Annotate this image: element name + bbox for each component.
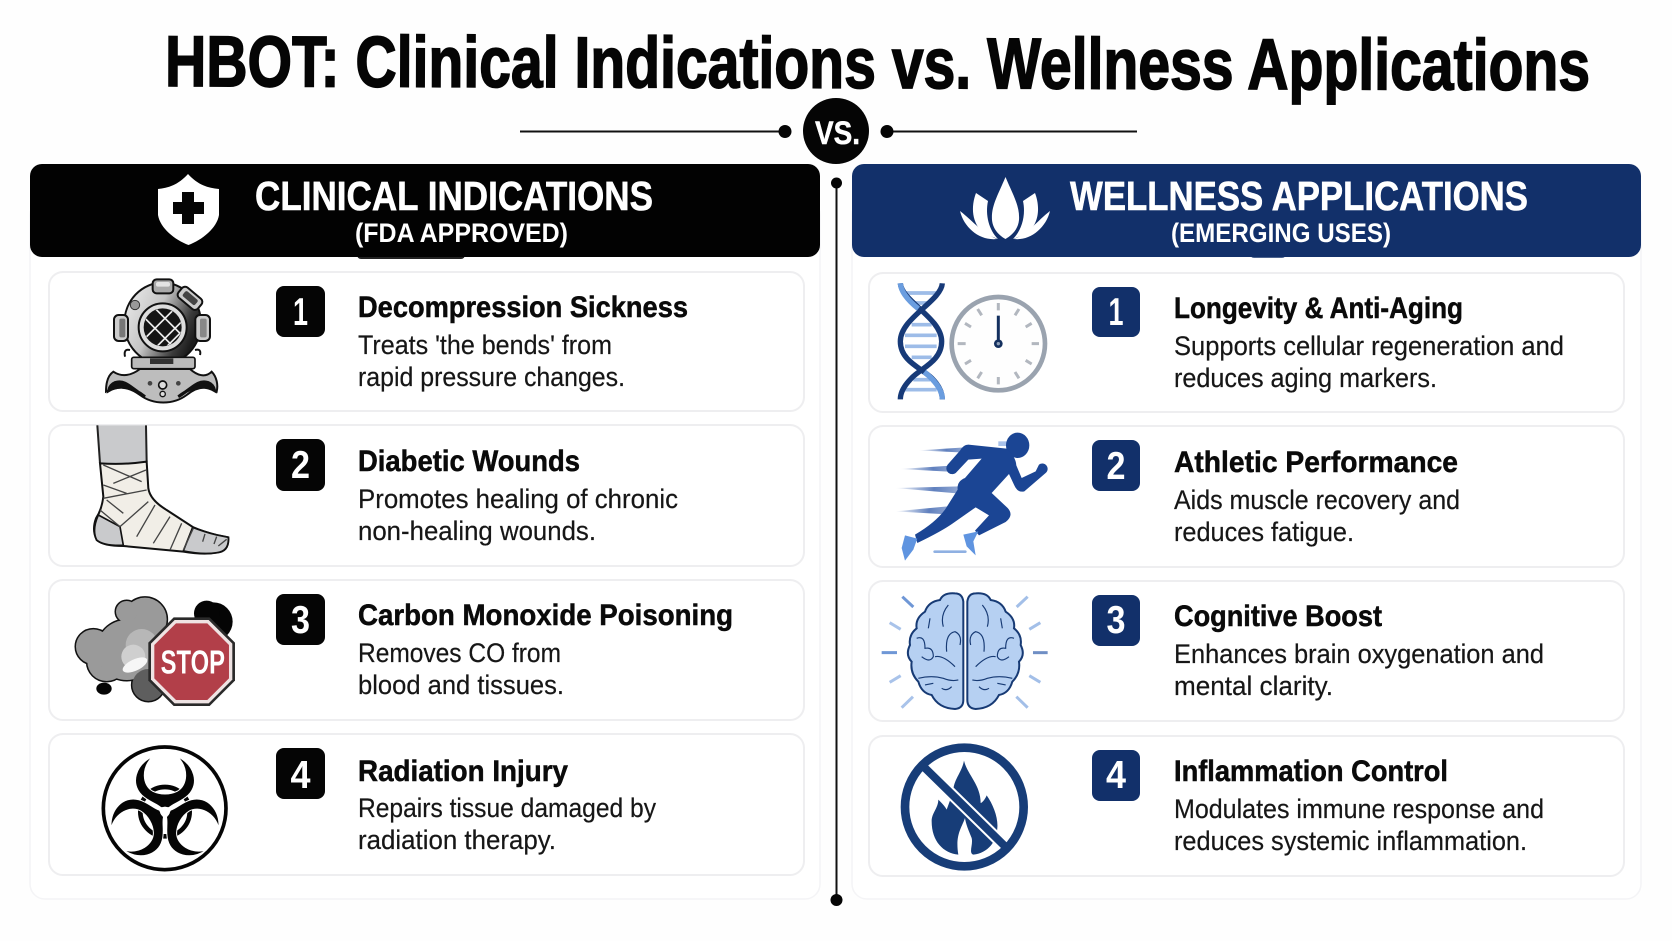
item heading: Longevity & Anti-Aging <box>1174 292 1463 325</box>
panel: clinical indications background <box>30 200 820 899</box>
wellness subheading: (EMERGING USES) <box>1171 218 1391 248</box>
number badge 2 <box>1092 440 1140 491</box>
number badge 4 <box>1092 750 1140 801</box>
item description: reduces systemic inflammation. <box>1174 826 1527 856</box>
item description: Promotes healing of chronic <box>358 484 678 514</box>
item description <box>358 638 564 700</box>
item description: Modulates immune response and <box>1174 794 1544 824</box>
icon: dna helix and clock <box>900 283 1045 399</box>
clinical heading: CLINICAL INDICATIONS <box>255 173 653 219</box>
item description <box>358 793 657 855</box>
item description <box>1174 331 1564 393</box>
item description: rapid pressure changes. <box>358 362 625 392</box>
number badge 2: 2 <box>1106 445 1126 488</box>
item description: Aids muscle recovery and <box>1174 485 1460 515</box>
number badge 4: 4 <box>290 754 311 797</box>
item description: blood and tissues. <box>358 670 564 700</box>
item description: Treats 'the bends' from <box>358 330 612 360</box>
item description: non-healing wounds. <box>358 516 596 546</box>
item description: reduces aging markers. <box>1174 363 1437 393</box>
clinical subheading: (FDA APPROVED) <box>355 218 568 248</box>
item description <box>1174 485 1460 547</box>
item description <box>1174 639 1544 701</box>
card: cognitive boost <box>869 581 1624 721</box>
item heading: Inflammation Control <box>1174 755 1448 788</box>
number badge 1: 1 <box>293 291 308 334</box>
card: diabetic wounds <box>49 425 804 566</box>
icon: shield with cross <box>158 174 219 245</box>
number badge 4 <box>276 748 325 799</box>
wellness heading: WELLNESS APPLICATIONS <box>1070 173 1528 219</box>
item description: Enhances brain oxygenation and <box>1174 639 1544 669</box>
vs divider: VS. <box>815 115 860 151</box>
number badge 1 <box>1092 287 1140 337</box>
item heading: Athletic Performance <box>1174 446 1458 479</box>
item description: mental clarity. <box>1174 671 1333 701</box>
clinical header <box>30 164 820 259</box>
icon: runner <box>895 433 1048 561</box>
item heading: Decompression Sickness <box>358 291 688 324</box>
item description: reduces fatigue. <box>1174 517 1354 547</box>
item description <box>358 484 678 546</box>
card: carbon monoxide poisoning <box>49 580 804 720</box>
item description: radiation therapy. <box>358 825 556 855</box>
card: athletic performance <box>869 426 1624 567</box>
number badge 3: 3 <box>1106 599 1126 642</box>
item description: Repairs tissue damaged by <box>358 793 657 823</box>
icon: lotus <box>960 177 1050 239</box>
number badge 3 <box>1092 595 1140 646</box>
number badge 2: 2 <box>291 444 310 487</box>
icon: diving helmet <box>106 279 217 402</box>
center vertical divider <box>830 178 842 906</box>
number badge 2 <box>276 439 325 491</box>
number badge 4: 4 <box>1106 754 1126 797</box>
icon: smoke cloud with stop sign: STOP <box>161 644 225 681</box>
item heading: Diabetic Wounds <box>358 445 580 478</box>
icon: crossed-out flame <box>905 748 1024 866</box>
item description <box>1174 794 1544 856</box>
card: longevity and anti-aging <box>869 273 1624 412</box>
icon: brain <box>882 593 1048 709</box>
item heading: Carbon Monoxide Poisoning <box>358 599 733 632</box>
icon: bandaged foot <box>94 425 228 554</box>
card: inflammation control <box>869 736 1624 876</box>
number badge 1: 1 <box>1108 291 1124 334</box>
vs divider <box>520 98 1137 164</box>
icon: smoke cloud with stop sign <box>76 598 235 706</box>
number badge 1 <box>276 286 325 337</box>
card: decompression sickness <box>49 272 804 411</box>
item heading: Radiation Injury <box>358 755 568 788</box>
icon: biohazard <box>103 747 227 870</box>
item heading: Cognitive Boost <box>1174 600 1382 633</box>
panel: wellness applications background <box>852 200 1641 899</box>
wellness header <box>852 164 1641 258</box>
item description: Removes CO from <box>358 638 561 668</box>
card: radiation injury <box>49 734 804 875</box>
item description <box>358 330 625 392</box>
number badge 3: 3 <box>291 599 310 642</box>
item description: Supports cellular regeneration and <box>1174 331 1564 361</box>
number badge 3 <box>276 594 325 645</box>
